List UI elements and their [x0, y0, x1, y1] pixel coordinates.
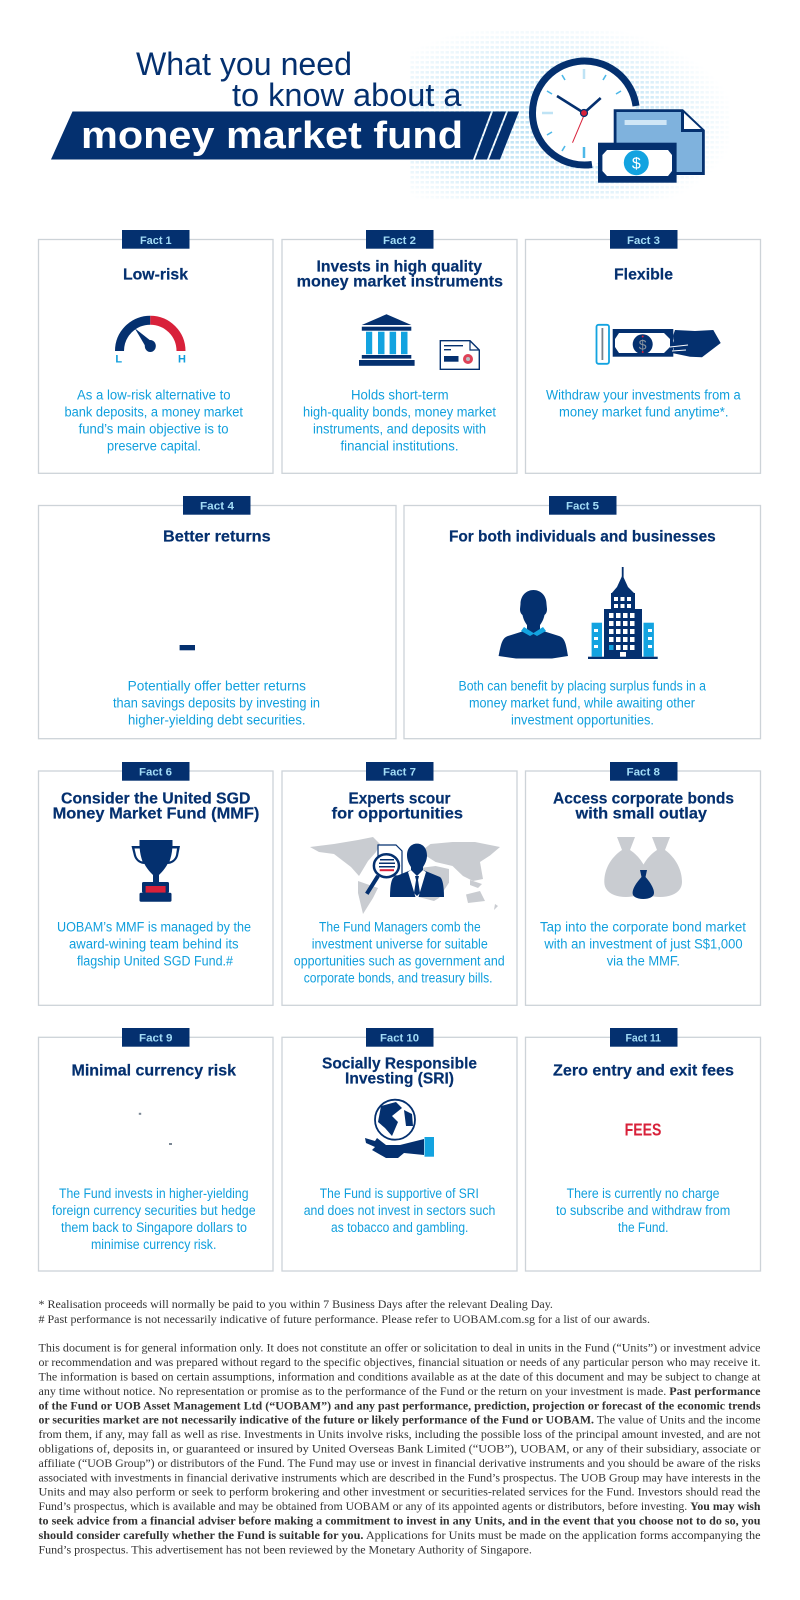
fact 1 text: As a low-risk alternative to: [77, 388, 231, 402]
panel: fact 10: [282, 1028, 517, 1271]
fact 4 text: than savings deposits by investing in: [113, 696, 320, 710]
fact 10 tag: Fact 10: [380, 1032, 419, 1044]
panel: fact 8: [526, 762, 760, 1005]
icon: risk gauge: [115, 320, 186, 366]
fact 3 tag: [610, 230, 678, 249]
icon: risk gauge: H: [178, 354, 186, 366]
fact 9 text: them back to Singapore dollars to: [61, 1220, 247, 1235]
fact 11 tag: [610, 1028, 678, 1047]
fees label: FEES: [625, 1120, 662, 1140]
fact 6 tag: Fact 6: [139, 766, 172, 778]
fact 7 tag: [366, 762, 434, 781]
panel: fact 4: [38, 496, 396, 739]
fact 5 tag: Fact 5: [566, 500, 599, 512]
fact 9 tag: [122, 1028, 190, 1047]
fact 10 text: as tobacco and gambling.: [331, 1220, 468, 1235]
fact 11 text: [556, 1186, 730, 1235]
legal disclaimer: Fund’s prospectus, which is available and may be obtained from UOBAM or any of its appointed agents or distributors, before investing. You may wish: [38, 1499, 761, 1513]
fact 2 tag: Fact 2: [383, 235, 416, 247]
fact 11 text: to subscribe and withdraw from: [556, 1203, 730, 1218]
panel: fact 11: [526, 1028, 760, 1271]
fact 9 tag: Fact 9: [139, 1032, 172, 1044]
fact 8 text: Tap into the corporate bond market: [540, 920, 746, 934]
fact 3 tag: Fact 3: [627, 235, 660, 247]
fact 3 text: [546, 388, 741, 420]
icon: money bags: [604, 837, 682, 899]
panel: fact 2: [282, 230, 517, 473]
icon: globe in hand: [365, 1100, 434, 1158]
legal disclaimer: of the Fund or UOB Asset Management Ltd (“UOBAM”) and any past performance, prediction, projection or forecast of the economic trends: [38, 1398, 761, 1412]
panel: fact 9: [38, 1028, 273, 1271]
fact 8 heading: [553, 790, 734, 822]
fact 11 heading: Zero entry and exit fees: [553, 1063, 734, 1080]
fact 2 text: [303, 388, 496, 454]
fact 7 heading: [332, 790, 463, 822]
legal disclaimer: to seek advice from a financial adviser before making a commitment to invest in any Units, and in the event that you choose not to do so, you: [38, 1514, 761, 1528]
fact 8 heading: Access corporate bonds: [553, 790, 734, 807]
footnotes: # Past performance is not necessarily indicative of future performance. Please refer to UOBAM.com.sg for a list of our awards.: [38, 1312, 650, 1326]
fact 10 heading: Investing (SRI): [345, 1070, 454, 1087]
fact 2 text: high-quality bonds, money market: [303, 404, 496, 420]
icon: document: [614, 109, 705, 175]
fact 9 text: The Fund invests in higher-yielding: [59, 1186, 248, 1201]
fact 11 text: the Fund.: [618, 1220, 668, 1235]
fact 10 heading: [322, 1055, 477, 1087]
fact 10 tag: [366, 1028, 434, 1047]
fact 3 text: money market fund anytime*.: [559, 404, 728, 420]
fact 1 text: fund’s main objective is to: [79, 422, 229, 436]
fact 4 text: [113, 678, 320, 728]
icon: certificate: [440, 341, 479, 369]
fact 6 heading: [53, 790, 259, 822]
fact 2 text: instruments, and deposits with: [313, 422, 486, 436]
fact 9 text: foreign currency securities but hedge: [52, 1203, 256, 1218]
fact 6 text: flagship United SGD Fund.#: [77, 954, 233, 968]
fact 11 tag: Fact 11: [626, 1032, 661, 1044]
fact 11 text: There is currently no charge: [567, 1186, 720, 1201]
fact 5 text: [458, 678, 706, 728]
fact 7 heading: Experts scour: [348, 790, 450, 807]
fact 9 heading: Minimal currency risk: [72, 1063, 236, 1080]
title banner: money market fund: [81, 115, 463, 157]
icon: banknote: [598, 143, 677, 183]
fact 3 heading: Flexible: [614, 266, 673, 283]
fact 5 tag: [549, 496, 616, 515]
fact 2 text: Holds short-term: [351, 388, 449, 402]
fact 9 text: [52, 1186, 256, 1252]
fact 6 tag: [122, 762, 190, 781]
fact 4 text: Potentially offer better returns: [128, 678, 306, 694]
legal disclaimer: [38, 1341, 761, 1556]
fact 4 text: higher-yielding debt securities.: [128, 712, 306, 728]
fact 4 heading: Better returns: [163, 529, 271, 546]
title: second line: to know about a: [232, 77, 462, 113]
chart remnant: small dots: [139, 1113, 172, 1145]
fact 8 tag: Fact 8: [626, 766, 660, 778]
panel: fact 1: [38, 230, 273, 473]
fact 10 text: [304, 1186, 495, 1235]
fact 7 text: investment universe for suitable: [312, 936, 488, 952]
fact 1 tag: Fact 1: [140, 235, 172, 247]
panel: fact 5: [404, 496, 760, 739]
fact 3 text: Withdraw your investments from a: [546, 388, 741, 402]
legal disclaimer: The information is based on certain assumptions, information and conditions available as at the date of this document and may be subject to change at: [38, 1370, 761, 1384]
legal disclaimer: Fund’s prospectus. This advertisement has not been reviewed by the Monetary Authority of Singapore.: [38, 1542, 532, 1556]
title banner: [51, 112, 519, 160]
fact 2 tag: [366, 230, 434, 249]
icon: expert with magnifier: [367, 844, 444, 897]
fact 8 text: [540, 920, 746, 968]
icon: banknote: $: [632, 156, 641, 172]
fact 1 tag: [122, 230, 190, 249]
legal disclaimer: or recommendation and was prepared without regard to the specific objectives, financial situation or needs of any particular person who may receive it.: [38, 1355, 760, 1369]
icon: cash withdrawal: [596, 325, 721, 364]
fact 5 text: money market fund, while awaiting other: [469, 696, 695, 710]
fact 8 tag: [610, 762, 678, 781]
fact 5 text: Both can benefit by placing surplus funds in a: [458, 678, 706, 694]
fact 6 text: award-wining team behind its: [69, 936, 239, 952]
panel: fact 6: [38, 762, 273, 1005]
fact 4 tag: [183, 496, 250, 515]
legal disclaimer: any time without notice. No representation or promise as to the performance of the Fund or the return on your investment is made. Past performance: [38, 1384, 761, 1398]
fact 7 text: corporate bonds, and treasury bills.: [304, 970, 492, 986]
icon: clock: [532, 61, 636, 165]
icon: trophy: [132, 840, 180, 902]
panel: fact 3: [526, 230, 760, 473]
fact 8 text: via the MMF.: [607, 954, 680, 968]
fact 7 tag: Fact 7: [383, 766, 416, 778]
fact 8 heading: with small outlay: [574, 805, 707, 822]
icon: office building: [588, 567, 658, 659]
legal disclaimer: Units and may also perform or seek to perform brokering and other investment or securities-related services for the Fund. Investors should read the: [38, 1485, 760, 1499]
fact 10 heading: Socially Responsible: [322, 1055, 477, 1072]
fact 1 text: [64, 388, 243, 454]
fact 10 text: and does not invest in sectors such: [304, 1203, 495, 1218]
panel: fact 7: [282, 762, 517, 1005]
title: first line: What you need: [136, 46, 352, 82]
legal disclaimer: This document is for general information only. It does not constitute an offer or solicitation to deal in units in the Fund (“Units”) or investment advice: [38, 1341, 761, 1355]
legal disclaimer: from them, if any, may fall as well as rise. Investments in Units involve risks, including the possible loss of the principal amount invested, and are not: [38, 1427, 761, 1441]
fact 2 heading: Invests in high quality: [316, 259, 482, 276]
legal disclaimer: affiliate (“UOB Group”) or distributors of the Fund. The Fund may use or invest in financial derivative instruments and you should be aware of the risks: [38, 1456, 761, 1470]
legal disclaimer: obligations of, deposits in, or guaranteed or insured by United Overseas Bank Limited (“UOB”), UOBAM, or any of their subsidiary, associate or: [38, 1442, 761, 1456]
fact 4 tag: Fact 4: [200, 500, 235, 512]
footnotes: * Realisation proceeds will normally be paid to you within 7 Business Days after the relevant Dealing Day.: [38, 1297, 553, 1311]
fact 6 text: UOBAM’s MMF is managed by the: [57, 920, 251, 934]
fact 10 text: The Fund is supportive of SRI: [320, 1186, 479, 1201]
footnotes: [38, 1297, 650, 1326]
fact 7 heading: for opportunities: [332, 805, 463, 822]
legal disclaimer: associated with investments in financial derivative instruments which are described in the Fund’s prospectus. The UOB Group may have interests in the: [38, 1470, 760, 1484]
icon: cash withdrawal: $: [639, 336, 647, 352]
icon: risk gauge: L: [115, 354, 122, 366]
fact 7 text: opportunities such as government and: [294, 954, 505, 968]
fact 7 text: [294, 920, 505, 986]
fact 2 heading: [297, 259, 503, 291]
icon: bank: [359, 314, 415, 366]
legal disclaimer: or securities market are not necessarily indicative of the future or likely performance of the Fund or UOBAM. The value of Units and the income: [38, 1413, 760, 1427]
fact 6 text: [57, 920, 251, 968]
chart remnant: small dash: [180, 645, 195, 650]
legal disclaimer: should consider carefully whether the Fund is suitable for you. Applications for Units must be made on the application forms accompanying the: [38, 1528, 760, 1542]
fact 5 text: investment opportunities.: [511, 712, 654, 728]
fact 9 text: minimise currency risk.: [91, 1237, 216, 1252]
fact 7 text: The Fund Managers comb the: [319, 920, 481, 934]
fact 8 text: with an investment of just S$1,000: [543, 936, 743, 952]
fact 2 text: financial institutions.: [340, 438, 458, 454]
header illustration and title: [51, 30, 730, 200]
fact 6 heading: Money Market Fund (MMF): [53, 805, 259, 822]
fact 2 heading: money market instruments: [297, 274, 503, 291]
icon: world map: [310, 837, 500, 914]
fact 1 text: bank deposits, a money market: [64, 404, 243, 420]
fact 1 heading: Low-risk: [123, 266, 188, 283]
icon: person: [499, 590, 568, 658]
fact 1 text: preserve capital.: [107, 438, 201, 454]
fact 6 heading: Consider the United SGD: [61, 790, 250, 807]
fact 5 heading: For both individuals and businesses: [449, 529, 716, 546]
